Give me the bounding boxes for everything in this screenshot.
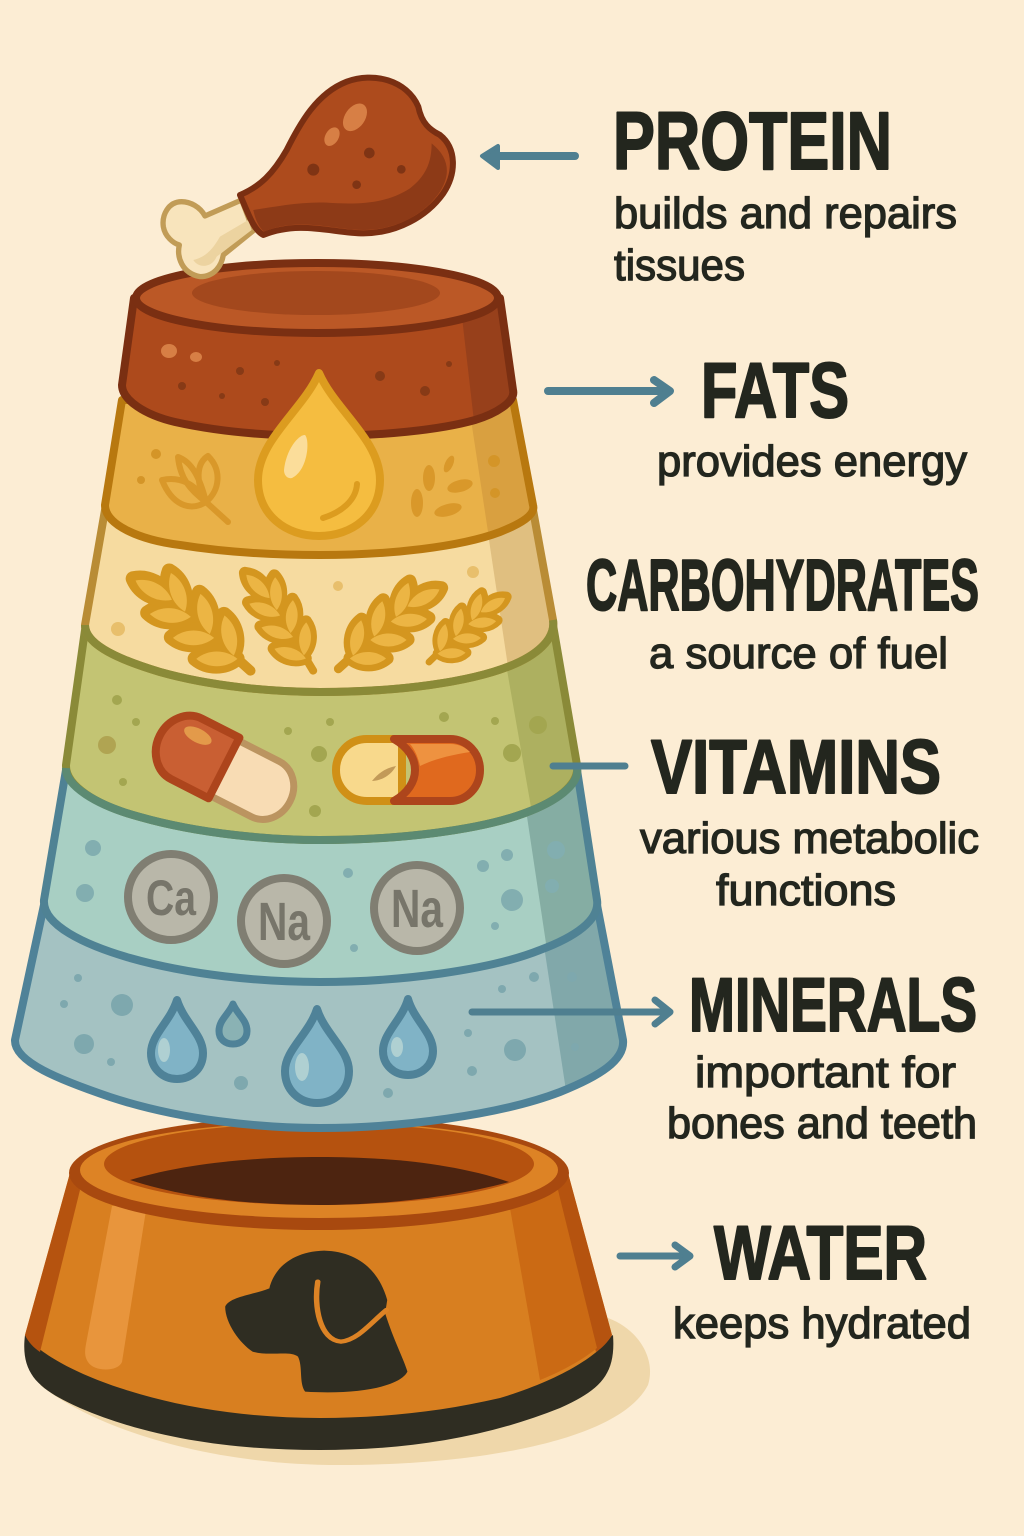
label: protein: PROTEIN: [613, 96, 892, 187]
label: carbohydrates: [586, 546, 979, 678]
capsule pill right: [336, 739, 480, 801]
wheat stalk 1: [116, 547, 271, 696]
arrow: water: [620, 1245, 690, 1267]
label: vitamins: VITAMINS: [651, 725, 941, 810]
layer: minerals: [44, 770, 640, 982]
mineral coin: Ca: Ca: [146, 870, 197, 926]
mineral coin: Na: Na: [258, 892, 311, 952]
mineral coin: Na: [241, 878, 327, 964]
mineral coin: Na: Na: [391, 879, 444, 939]
wheat stalk 3: [321, 560, 457, 691]
label: water: keeps hydrated: [673, 1299, 971, 1348]
label: protein: [482, 96, 957, 290]
water drop 2: [219, 1004, 247, 1044]
bowl interior: [130, 1157, 509, 1205]
mineral coin: Ca: [128, 854, 214, 940]
label: minerals: important for: [695, 1048, 956, 1097]
dog bowl: [24, 1116, 613, 1450]
label: vitamins: [553, 725, 979, 915]
label: water: [620, 1211, 971, 1348]
water drop 1: [151, 1000, 203, 1079]
wheat stalk 4: [415, 576, 519, 679]
grain icon: [411, 454, 474, 519]
label: carbohydrates: a source of fuel: [649, 629, 948, 678]
label: protein: tissues: [614, 241, 745, 290]
icon: chicken drumstick: [163, 78, 453, 277]
layer: vitamins: [66, 625, 640, 840]
arrow: fats: [548, 380, 670, 403]
bowl shadow: [40, 1318, 650, 1465]
arrow: minerals: [472, 1000, 670, 1024]
label: minerals: bones and teeth: [667, 1099, 977, 1148]
label: water: WATER: [714, 1211, 927, 1296]
dog head silhouette: [225, 1251, 407, 1392]
layer: fats: [101, 396, 538, 559]
water drop 3: [285, 1009, 349, 1103]
label: vitamins: various metabolic: [640, 814, 979, 863]
leaf icon: [162, 456, 228, 522]
water drop 4: [383, 999, 433, 1075]
label: fats: [548, 346, 967, 486]
connector: vitamins: [553, 762, 625, 770]
layer: water: [15, 900, 640, 1130]
layer: carbohydrates: [81, 508, 558, 696]
label: protein: builds and repairs: [614, 189, 957, 238]
oil drop: [258, 373, 380, 536]
label: vitamins: functions: [716, 866, 896, 915]
label: fats: provides energy: [657, 437, 967, 486]
capsule pill left: [144, 705, 305, 832]
label: minerals: [472, 963, 977, 1148]
protein top surface: [136, 263, 498, 333]
bowl highlight: [85, 1204, 147, 1370]
mineral coin: Na: [374, 865, 460, 951]
layer: protein: [118, 259, 518, 439]
wheat stalk 2: [228, 555, 334, 685]
label: fats: FATS: [701, 346, 849, 434]
arrow: protein: [482, 146, 575, 168]
